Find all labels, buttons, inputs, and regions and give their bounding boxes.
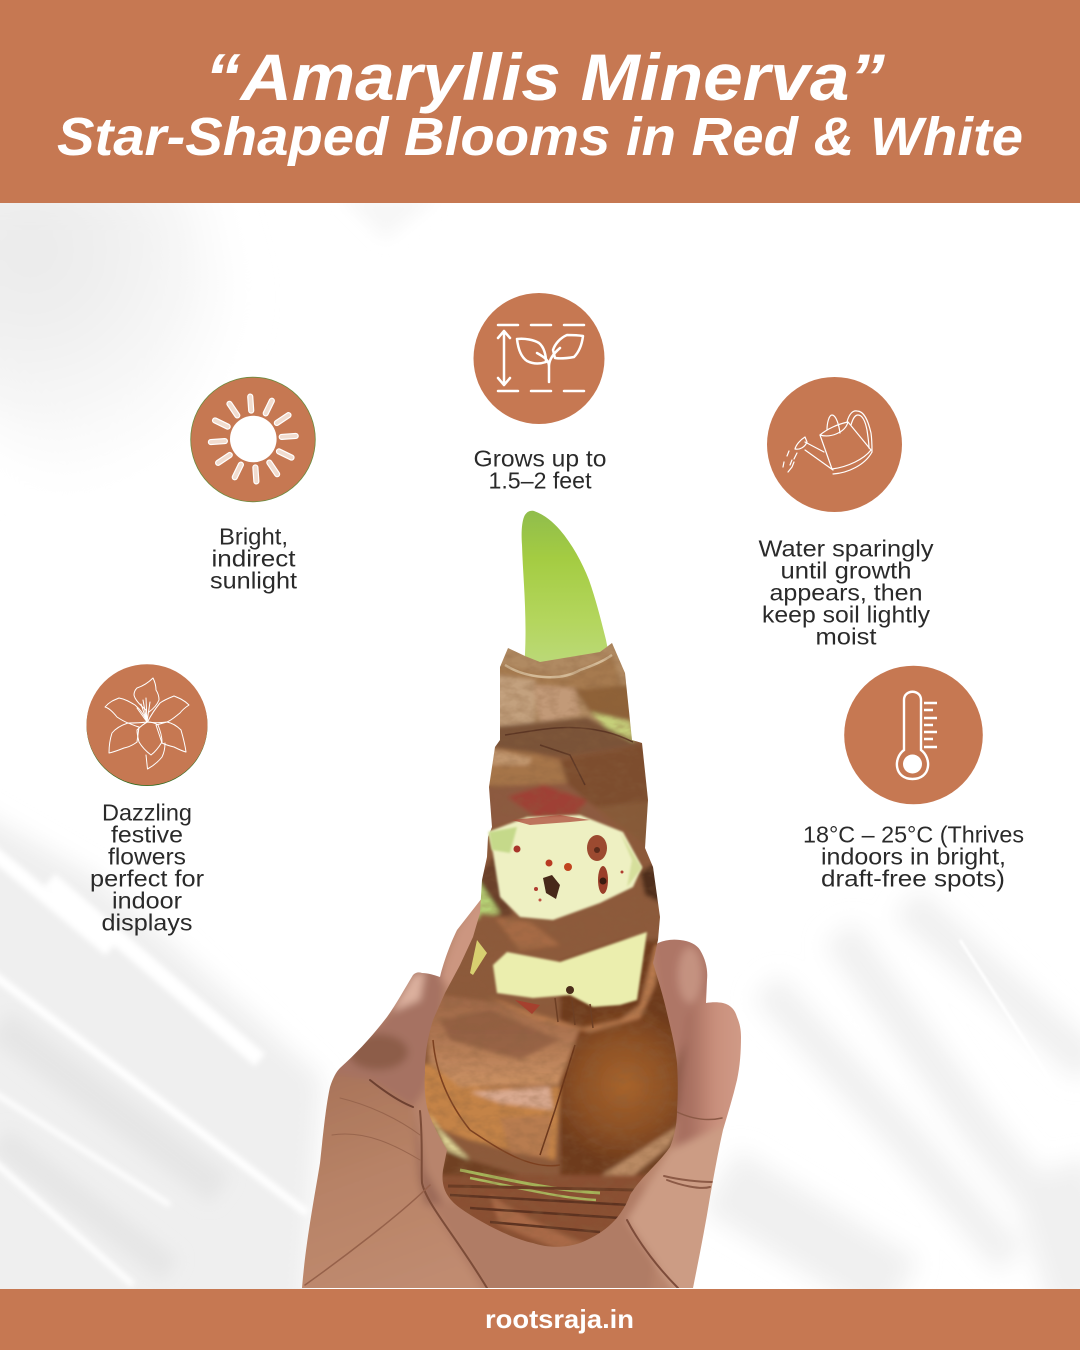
label: sunlight [210,524,298,594]
label: watering: Water sparingly [758,536,934,562]
label: watering: until growth [780,558,912,584]
title [57,40,1023,167]
title: “Amaryllis Minerva” [205,40,885,114]
bulb [424,643,678,1247]
label: temperature [803,822,1024,892]
label: watering: keep soil lightly [762,602,931,628]
green shoot [522,511,612,670]
panel: sunlight [191,377,315,594]
icon: thermometer [844,666,983,804]
footer band [0,1289,1080,1350]
label: height [474,446,606,494]
website: rootsraja.in [485,1304,634,1334]
panel: temperature [803,666,1024,892]
label: temperature: 18°C – 25°C (Thrives [803,822,1024,848]
label: sunlight: sunlight [210,568,298,594]
icon: lily flower [86,664,208,786]
label: temperature: draft-free spots) [821,866,1005,892]
icon: sun [191,377,315,502]
label: watering: moist [816,624,877,650]
header band [0,0,1080,203]
label: temperature: indoors in bright, [821,844,1006,870]
label: flowers: indoor [112,888,182,914]
label: flowers: displays [102,910,192,936]
label: watering [758,536,934,650]
icon: plant height [474,293,604,424]
panel: watering [758,377,934,650]
label: height: Grows up to [474,446,606,472]
icon: watering can [767,377,902,512]
label: flowers: flowers [108,844,186,870]
hand [302,900,741,1288]
bulb texture [425,643,668,1232]
panel: height [474,293,606,494]
label: flowers: perfect for [90,866,204,892]
label: sunlight: Bright, [219,524,288,550]
label: watering: appears, then [770,580,922,606]
label: sunlight: indirect [212,546,296,572]
label: flowers: Dazzling [102,800,192,826]
label: flowers [90,800,204,936]
title: Star-Shaped Blooms in Red & White [57,107,1023,167]
panel: flowers [86,664,208,936]
photo: hand holding amaryllis bulb [280,511,760,1310]
label: height: 1.5–2 feet [488,468,592,494]
cream bulb sections with spots [470,815,647,1028]
label: flowers: festive [111,822,183,848]
